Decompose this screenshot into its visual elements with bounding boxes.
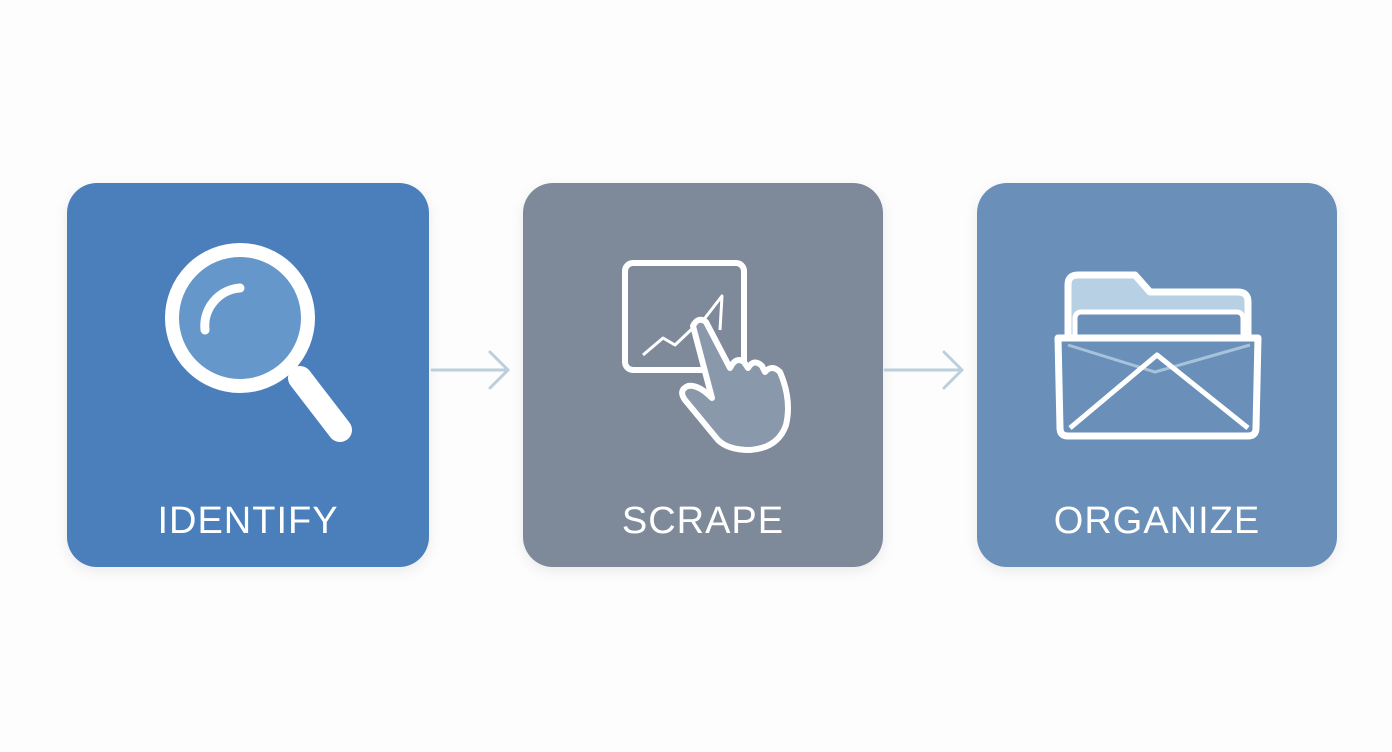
panel: organize: [977, 183, 1337, 567]
icon: folder with envelope: [1058, 275, 1258, 436]
icon: magnifying glass: [172, 250, 340, 430]
label: scrape: SCRAPE: [622, 500, 784, 542]
label: identify: IDENTIFY: [157, 500, 339, 542]
label: organize: ORGANIZE: [1054, 500, 1260, 542]
panel: identify: [67, 183, 429, 567]
icon: chart with pointing hand: [625, 263, 788, 450]
arrow: identify to scrape: [432, 352, 508, 388]
panel: scrape: [523, 183, 883, 567]
arrow: scrape to organize: [885, 352, 962, 388]
